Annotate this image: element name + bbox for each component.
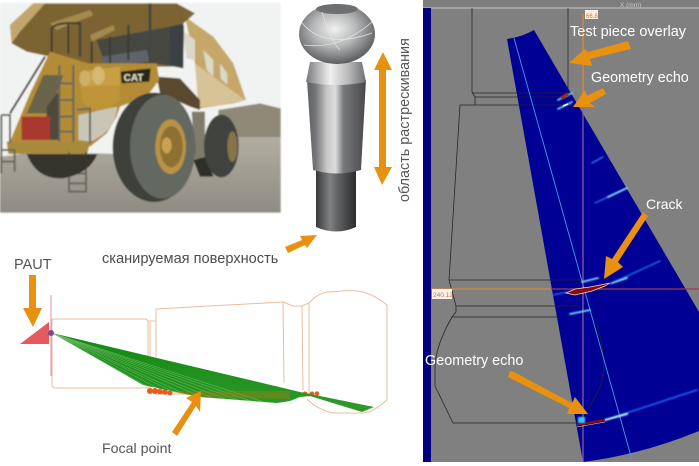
truck fender: [78, 107, 117, 142]
focal points: [147, 388, 319, 396]
label: focal point: Focal point: [102, 441, 171, 457]
stud collar: [306, 62, 366, 85]
cursor value x: [585, 10, 598, 19]
label: geometry echo bottom: Geometry echo: [425, 353, 523, 369]
photo: steel ball stud: [299, 4, 375, 232]
truck stairs: [27, 75, 63, 113]
truck left wheel: [27, 154, 97, 178]
ultrasound beam: [52, 333, 374, 412]
focal zone overlay: [165, 391, 290, 399]
truck dark wheel arch: [157, 77, 200, 110]
scale strip: [423, 8, 431, 462]
arrow: test piece overlay: [569, 41, 631, 66]
axis label: X (mm): [620, 2, 641, 9]
crack echo: [566, 283, 610, 295]
arrow: focal point: [172, 391, 201, 436]
truck bumper: [7, 142, 90, 154]
label: geometry echo top: Geometry echo: [591, 70, 689, 86]
diagram: phased array beam on stud: [20, 291, 387, 413]
cursor value y: [432, 289, 452, 299]
truck CAT badge: [121, 68, 151, 83]
truck front deck: [8, 52, 159, 147]
photo: mining dump truck: CAT: [124, 73, 143, 84]
photo background: quarry wall: [218, 103, 281, 137]
label: test piece overlay: Test piece overlay: [570, 24, 687, 40]
probe wedge: [20, 322, 49, 344]
geometry echoes: [561, 94, 568, 98]
arrow: crack: [604, 212, 648, 279]
stud threaded end: [316, 170, 356, 232]
specimen outline: [435, 8, 603, 423]
label: cracking area: область растрескивания: [397, 38, 413, 202]
center ray: [514, 38, 632, 460]
sector fan: [507, 30, 699, 462]
photo: mining dump truck: [0, 3, 281, 213]
panel: ultrasound sector scan: 240.12: [433, 292, 453, 299]
truck dump body side: [185, 17, 246, 108]
panel: ultrasound sector scan: 66.8: [586, 14, 598, 20]
icon: double arrow, cracking area: [374, 52, 392, 185]
truck rear wheel: [193, 157, 213, 177]
truck rear strut: [192, 112, 205, 160]
photo background: ground: [0, 137, 281, 213]
echoes: [553, 93, 697, 420]
truck red tank: [22, 117, 50, 140]
scan header bar: [423, 0, 699, 8]
arrow: geometry echo bottom: [508, 371, 588, 414]
label: scanned surface: сканируемая поверхность: [102, 251, 278, 267]
truck rails: [10, 3, 150, 113]
truck main wheel: [113, 93, 195, 202]
panel: ultrasound sector scan: [423, 0, 699, 462]
horizontal cursor: [431, 288, 551, 290]
beam hatching: [52, 333, 267, 403]
probe element: [48, 330, 54, 336]
stud outline: [52, 291, 387, 413]
truck canopy: [10, 3, 195, 67]
label: PAUT: PAUT: [14, 257, 52, 273]
arrow: geometry echo top: [573, 88, 606, 107]
arrow: PAUT: [23, 275, 42, 327]
stud shaft: [307, 80, 366, 174]
arrow: to scanned surface: [285, 235, 317, 253]
truck ladders: [1, 65, 90, 192]
vertical cursor: [582, 14, 584, 107]
label: crack: Crack: [646, 196, 684, 212]
truck cab area: [97, 23, 183, 68]
stud ball: [299, 4, 375, 64]
probe axis: [50, 295, 52, 376]
